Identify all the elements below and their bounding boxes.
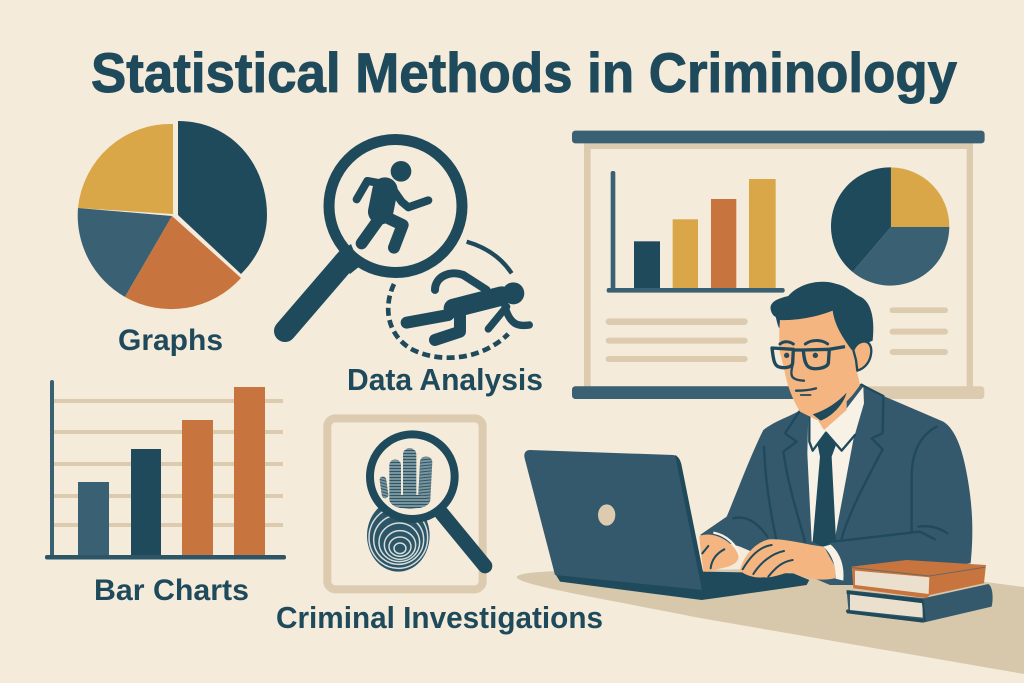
label: data analysis: Data Analysis (347, 362, 543, 397)
label: bar charts: Bar Charts (94, 574, 249, 607)
magnifier handle (285, 259, 347, 331)
collar and lapel lines (733, 385, 947, 542)
neck (812, 393, 847, 430)
hands (699, 533, 844, 581)
hand print (379, 448, 433, 509)
magnifier collar (335, 244, 360, 274)
laptop (524, 450, 809, 600)
icon: magnifier with running figure and fallen body (285, 140, 529, 358)
suit (700, 383, 972, 585)
right hand (740, 539, 836, 580)
finger lines (702, 545, 793, 577)
magnifier lens (329, 140, 462, 272)
eyes (784, 353, 789, 358)
bar chart (45, 380, 286, 560)
board pie chart (831, 167, 949, 286)
label: criminal investigations: Criminal Investigations (276, 600, 603, 635)
running figure (357, 161, 428, 248)
upper book (852, 560, 986, 598)
board bar chart (607, 171, 785, 293)
man at laptop (700, 282, 972, 585)
board rails (572, 131, 985, 143)
eyebrows (780, 340, 828, 344)
left cuff (713, 533, 740, 557)
handle (442, 513, 485, 566)
board text lines (606, 307, 948, 362)
lid edge (675, 455, 704, 590)
frame (327, 418, 483, 589)
presentation board (572, 131, 985, 399)
right cuff (823, 545, 844, 581)
title: Statistical Methods in Criminology (91, 41, 957, 104)
shadow under chin (813, 393, 847, 421)
books (846, 560, 993, 623)
tie (813, 432, 836, 547)
glasses (772, 347, 845, 369)
shirt (807, 387, 864, 542)
left hand (699, 534, 739, 572)
icon: fingerprint under magnifier in frame (327, 418, 485, 589)
label: graphs: Graphs (118, 324, 223, 357)
desk (517, 568, 1024, 674)
board frame (584, 143, 984, 399)
lower book (846, 584, 993, 623)
ear (853, 341, 871, 371)
pie chart: graphs (78, 121, 267, 309)
laptop lid (524, 450, 702, 590)
nose and mouth (791, 365, 816, 395)
fallen figure with dashed outline (388, 242, 529, 358)
lens interior (370, 434, 455, 519)
laptop logo (598, 504, 615, 526)
head (779, 307, 860, 420)
lens ring (370, 434, 455, 519)
fingerprint (367, 500, 430, 572)
laptop base (556, 572, 809, 600)
hair (771, 282, 873, 350)
